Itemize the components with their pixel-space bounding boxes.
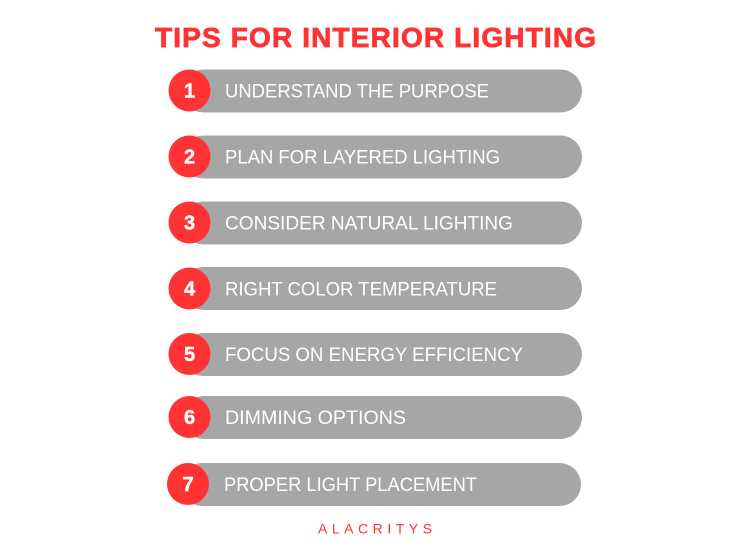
tip 7 bbox=[167, 463, 581, 506]
tip 2: 2 bbox=[184, 146, 195, 168]
tip 4 bbox=[168, 267, 582, 310]
tip 5 bbox=[168, 333, 582, 376]
tip 3 bbox=[168, 202, 582, 244]
tip 2: PLAN FOR LAYERED LIGHTING bbox=[225, 146, 500, 168]
tip 5: 5 bbox=[184, 344, 195, 366]
tip 4: 4 bbox=[184, 278, 196, 300]
tip 5: FOCUS ON ENERGY EFFICIENCY bbox=[225, 344, 523, 366]
tip 6 bbox=[168, 396, 582, 439]
brand name: ALACRITYS bbox=[318, 520, 432, 536]
tip 7: PROPER LIGHT PLACEMENT bbox=[224, 474, 477, 496]
tip 3: CONSIDER NATURAL LIGHTING bbox=[225, 212, 513, 234]
tip 7: 7 bbox=[182, 474, 194, 496]
tip 1: 1 bbox=[184, 80, 195, 102]
tip 2 bbox=[168, 136, 582, 178]
tip 6: DIMMING OPTIONS bbox=[225, 407, 406, 429]
tip 6: 6 bbox=[184, 407, 195, 429]
tip 1: UNDERSTAND THE PURPOSE bbox=[225, 80, 489, 102]
title: TIPS FOR INTERIOR LIGHTING bbox=[155, 22, 596, 53]
tip 1 bbox=[168, 70, 582, 112]
tip 3: 3 bbox=[184, 212, 195, 234]
tip 4: RIGHT COLOR TEMPERATURE bbox=[225, 278, 497, 300]
